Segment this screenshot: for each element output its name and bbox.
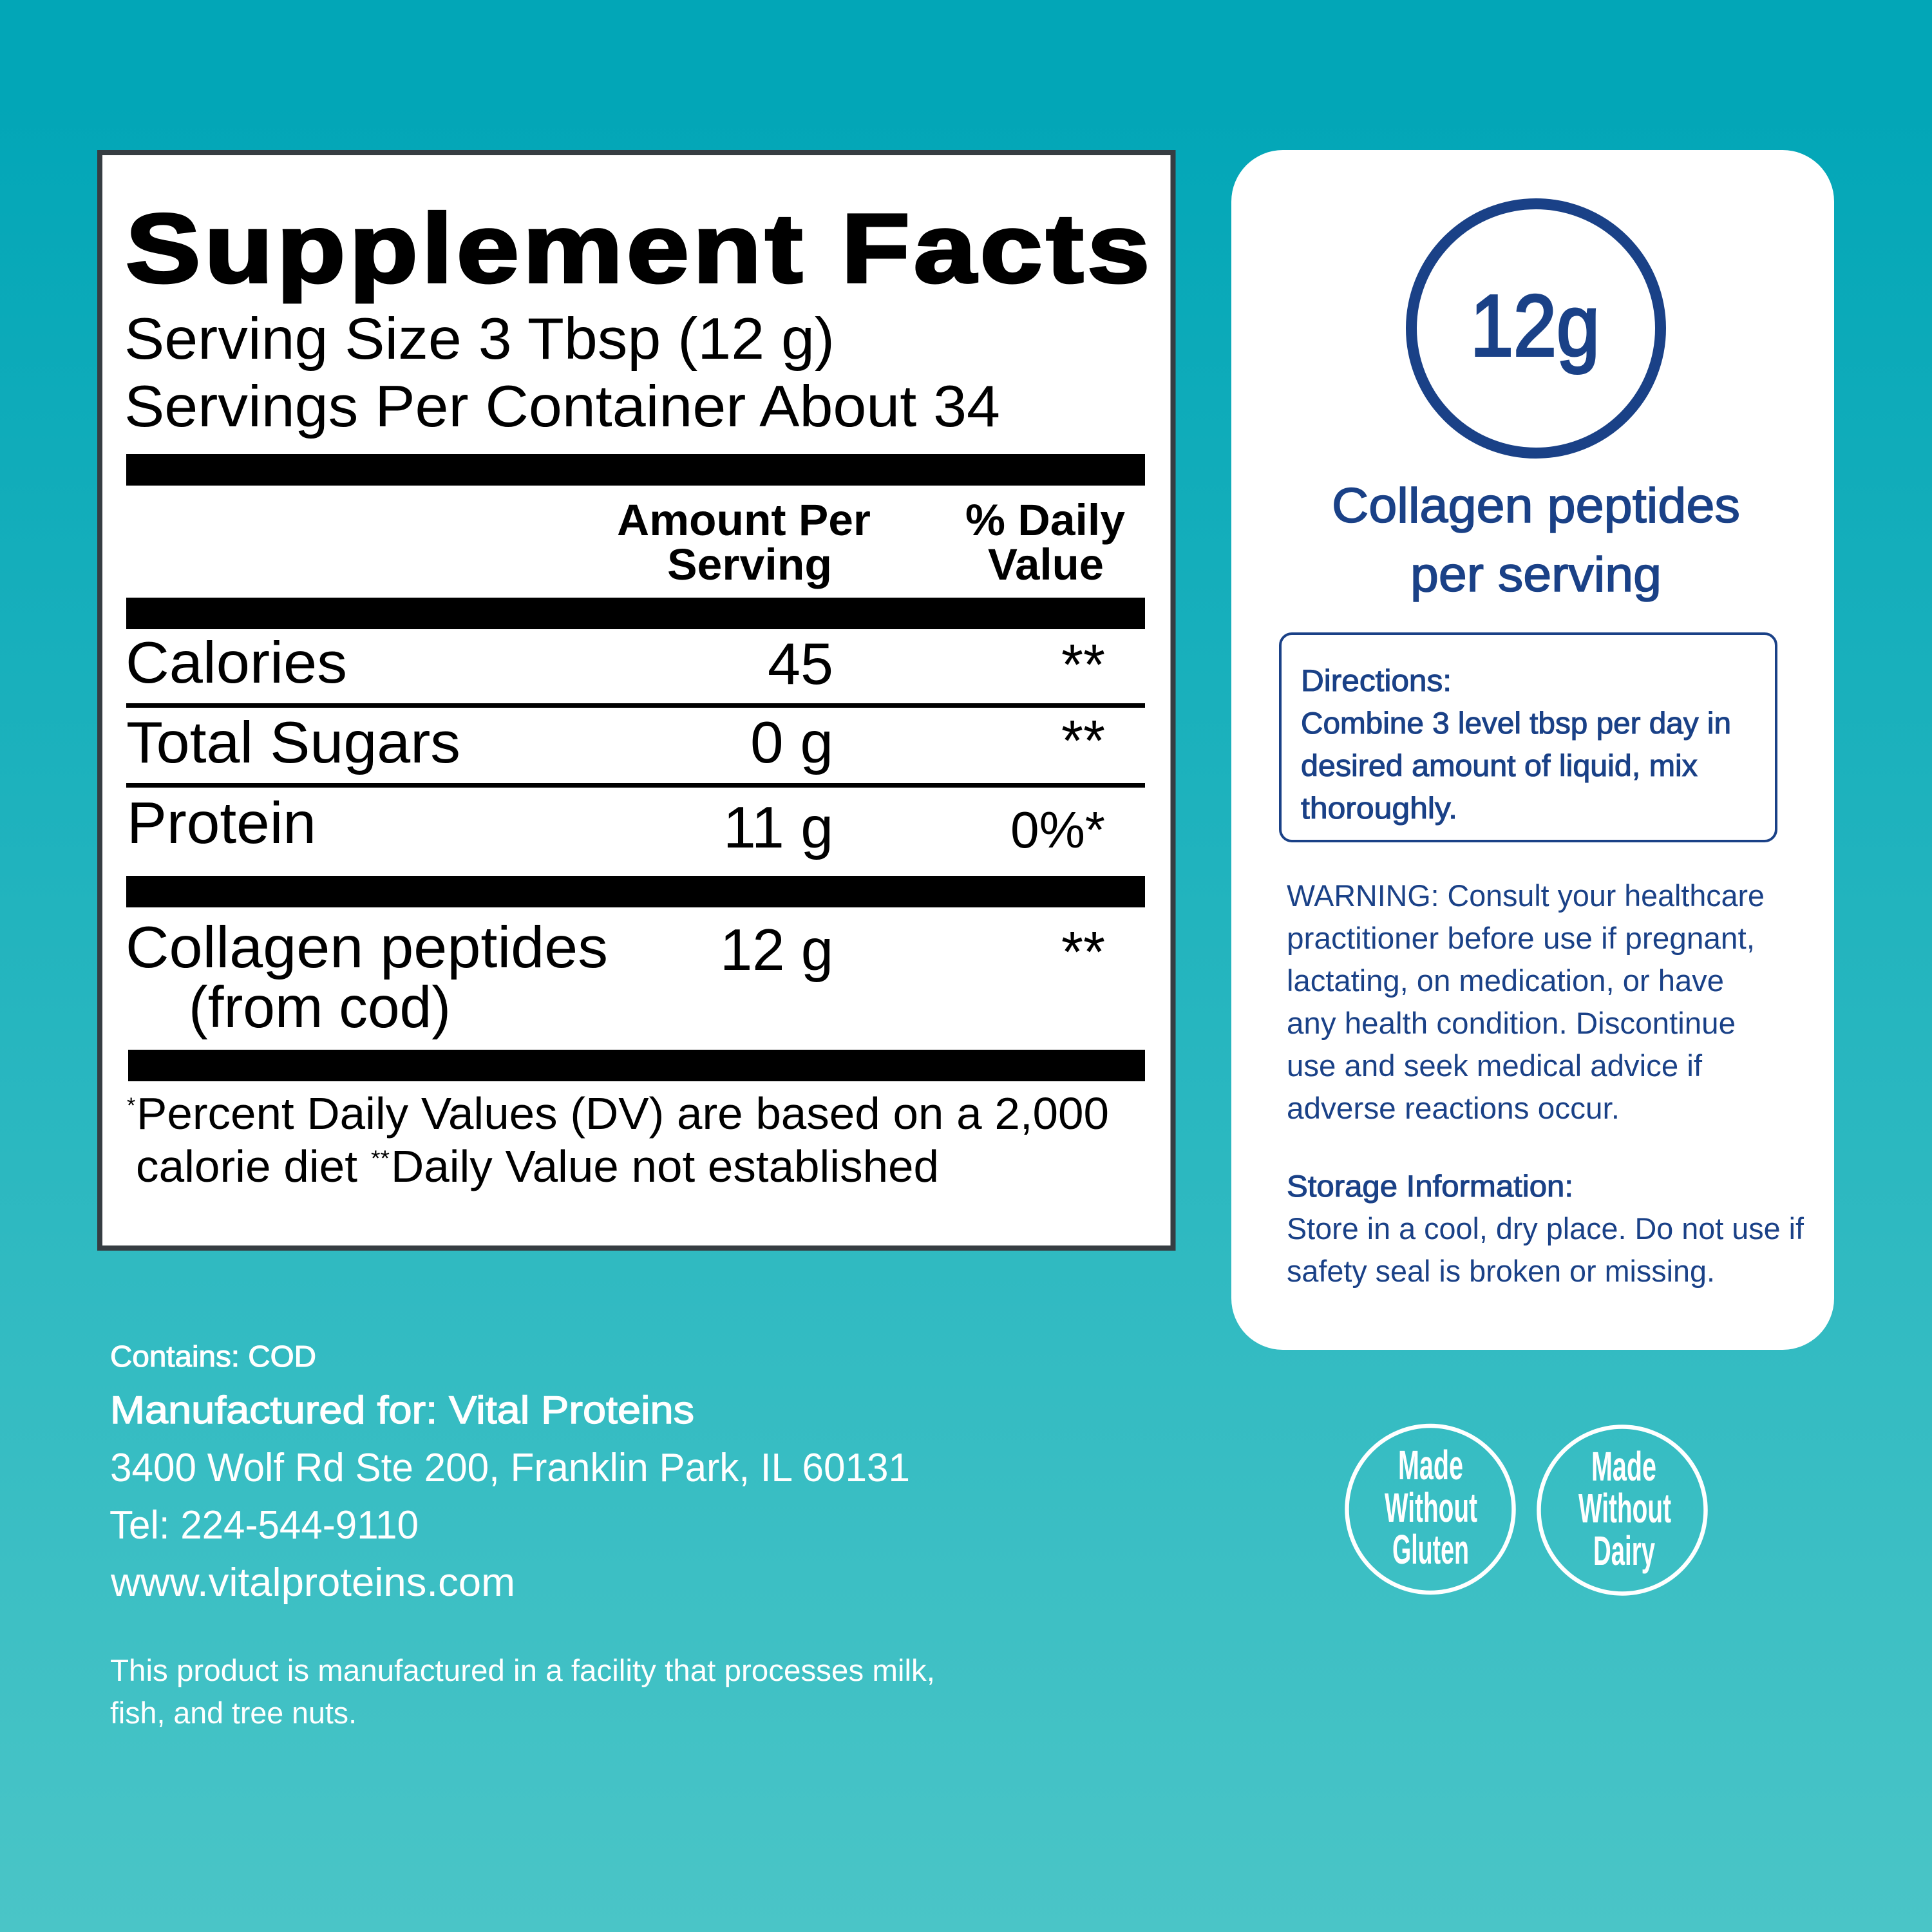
row: calories: Calories	[126, 630, 347, 696]
text: manufacturer info: Tel: 224-544-9110	[109, 1503, 419, 1548]
badge: made without dairy: Without	[1578, 1485, 1671, 1531]
badge: made without gluten: Gluten	[1392, 1526, 1469, 1573]
divider bar: header	[126, 598, 1145, 629]
divider bar: top	[126, 454, 1145, 486]
divider line	[126, 783, 1145, 788]
row: collagen peptides	[126, 915, 1105, 1040]
badge: made without dairy	[1539, 1427, 1705, 1593]
footnote: Daily Value not established	[391, 1141, 939, 1191]
text: allergen facility note: fish, and tree nuts.	[110, 1696, 357, 1730]
row: calories: 45	[768, 632, 833, 697]
text: serving size: Serving Size 3 Tbsp (12 g)	[124, 307, 835, 372]
box: directions: Directions:	[1301, 663, 1452, 697]
column header: percent daily value	[965, 495, 1125, 589]
footnote	[127, 1088, 1109, 1191]
row: protein: 0%*	[1010, 801, 1105, 858]
text: servings per container: Servings Per Container About 34	[124, 374, 1000, 439]
box: directions: thoroughly.	[1301, 791, 1457, 825]
text: warning: practitioner before use if pregnant,	[1287, 921, 1755, 955]
divider bar: mid	[126, 876, 1145, 907]
footnote: **	[371, 1146, 390, 1171]
divider bar: bottom	[128, 1050, 1145, 1081]
heading: collagen peptides per serving: per serving	[1410, 547, 1662, 602]
row: protein: 11 g	[723, 795, 833, 860]
text: manufacturer info	[109, 1340, 910, 1605]
footnote: calorie diet	[136, 1141, 357, 1191]
text: manufacturer info: Contains: COD	[110, 1340, 316, 1373]
badge: made without dairy: Dairy	[1593, 1528, 1655, 1574]
divider line	[126, 703, 1145, 708]
heading: collagen peptides per serving: Collagen peptides	[1332, 478, 1740, 533]
heading: Supplement Facts: Supplement Facts	[126, 194, 1150, 303]
row: calories	[126, 630, 1105, 697]
text: warning: use and seek medical advice if	[1287, 1048, 1703, 1083]
text: allergen facility note	[110, 1653, 935, 1730]
text: warning: any health condition. Discontinue	[1287, 1006, 1736, 1040]
row: collagen peptides: Collagen peptides	[126, 915, 608, 980]
column header: percent daily value: Value	[988, 540, 1104, 589]
text: manufacturer info: Manufactured for: Vital Proteins	[110, 1388, 694, 1432]
text: warning: adverse reactions occur.	[1287, 1091, 1620, 1125]
badge: made without gluten: Made	[1398, 1442, 1463, 1488]
box: directions	[1280, 634, 1776, 841]
text: storage information: Store in a cool, dry place. Do not use if	[1287, 1211, 1804, 1245]
column header: amount per serving: Serving	[667, 540, 832, 589]
row: protein: Protein	[127, 791, 316, 856]
row: total sugars: Total Sugars	[126, 710, 460, 775]
row: total sugars: **	[1061, 709, 1105, 773]
footnote: Percent Daily Values (DV) are based on a 2,000	[137, 1088, 1109, 1139]
text: warning	[1287, 878, 1765, 1125]
column header: amount per serving	[617, 495, 871, 589]
column header: percent daily value: % Daily	[965, 495, 1125, 545]
text: storage information	[1287, 1169, 1804, 1288]
box: directions: desired amount of liquid, mix	[1301, 748, 1698, 782]
row: collagen peptides: **	[1061, 920, 1105, 985]
text: manufacturer info: www.vitalproteins.com	[110, 1560, 515, 1605]
row: calories: **	[1061, 633, 1105, 697]
row: collagen peptides: 12 g	[720, 918, 833, 983]
badge: made without dairy: Made	[1591, 1443, 1656, 1490]
text: manufacturer info: 3400 Wolf Rd Ste 200, Franklin Park, IL 60131	[110, 1446, 910, 1490]
row: collagen peptides: (from cod)	[189, 975, 451, 1040]
heading: collagen peptides per serving	[1332, 478, 1740, 602]
text: warning: lactating, on medication, or have	[1287, 963, 1724, 998]
text: warning: WARNING: Consult your healthcare	[1287, 878, 1765, 913]
text: allergen facility note: This product is manufactured in a facility that processes milk,	[110, 1653, 935, 1687]
text: storage information: Storage Information:	[1287, 1169, 1573, 1203]
badge: 12g circle	[1412, 204, 1660, 453]
row: protein	[127, 791, 1105, 860]
row: total sugars: 0 g	[750, 710, 833, 775]
row: total sugars	[126, 709, 1105, 775]
panel: supplement facts label	[100, 153, 1173, 1248]
column header: amount per serving: Amount Per	[617, 495, 871, 545]
footnote: *	[127, 1094, 135, 1118]
box: directions: Combine 3 level tbsp per day in	[1301, 706, 1731, 740]
badge: made without gluten: Without	[1385, 1484, 1477, 1531]
badge: made without gluten	[1347, 1426, 1513, 1593]
text: storage information: safety seal is broken or missing.	[1287, 1254, 1715, 1288]
badge: 12g circle: 12g	[1470, 277, 1600, 374]
panel: white info card	[1231, 150, 1834, 1350]
